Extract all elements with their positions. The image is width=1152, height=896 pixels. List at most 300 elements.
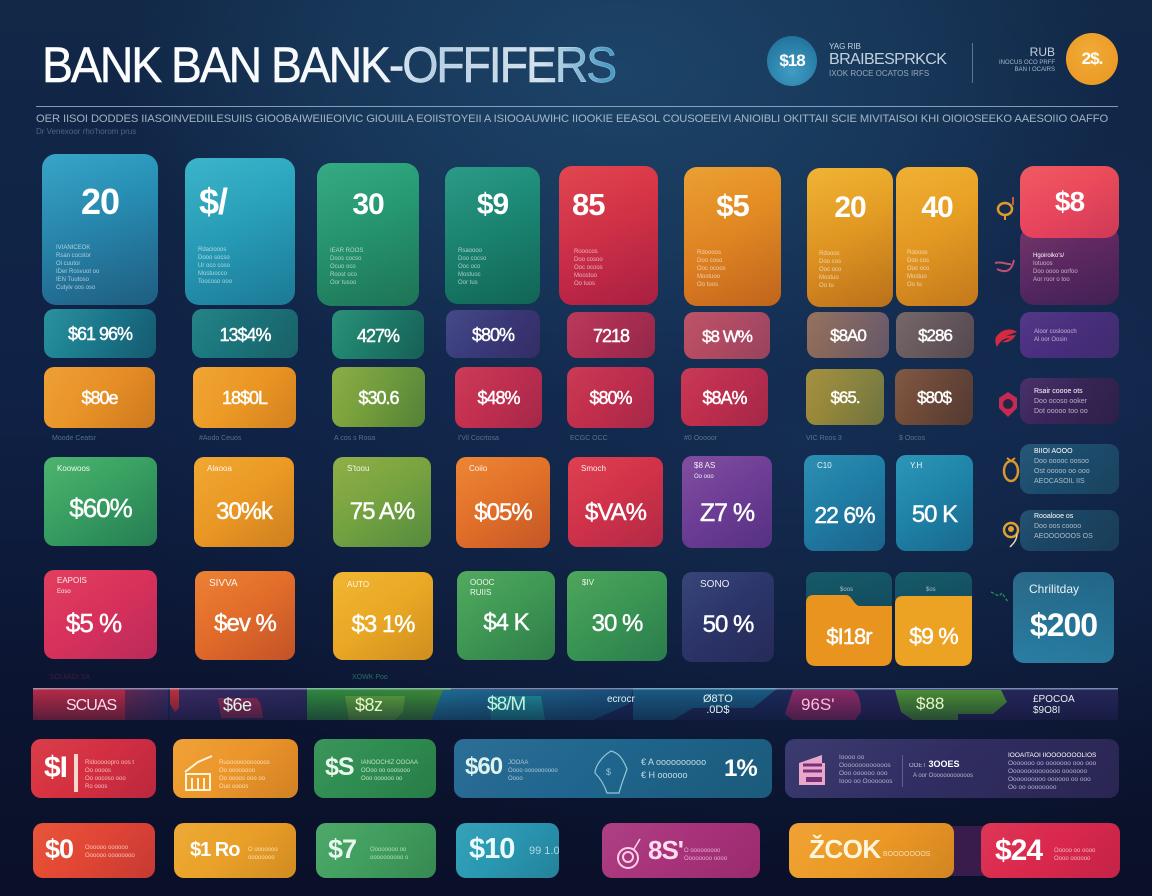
discount card: deep orange (456, 457, 550, 548)
value: 18$0L (222, 388, 267, 408)
value: $200 (1030, 607, 1097, 643)
details: Doo oooo oorfoo (1033, 269, 1078, 275)
details: JOOAA (508, 760, 528, 766)
info card: blue lower (1020, 510, 1119, 551)
icon: ring (996, 197, 1014, 220)
details (1034, 388, 1088, 415)
caption: ECGC OCC (570, 435, 608, 442)
header text: left block (829, 42, 947, 78)
details: Rsan cocstor (56, 253, 91, 259)
value: 427% (357, 326, 399, 346)
value: $65. (830, 388, 860, 407)
value: $4 K (483, 609, 529, 636)
details: Oooooo oooooo (85, 845, 128, 851)
details: Hgoiroiko's/ (1033, 253, 1064, 259)
details: Ooc oco (907, 266, 929, 272)
rate card (567, 312, 655, 358)
value: $80e (81, 388, 118, 408)
details: Rsair coooe ots (1034, 388, 1083, 395)
rate card (44, 309, 156, 358)
caption: Moode Ceatsr (52, 435, 96, 442)
details: Doo coso (697, 258, 722, 264)
rate card (192, 309, 298, 358)
ribbon value: $9O8I (1033, 705, 1060, 716)
details (508, 759, 558, 783)
subtitle: OER IISOI DODDES IIASOINVEDIILESUIIS GIOOBAIWEIIEOIVIC GIOUIILA EOIISTOYEII A ISIOOAUWIHC IIOOKIE EEASOL COUSOEEIVI ANIOIBLI OKITTAII SCIE MIVITAISOI KHI OIOIOSEEKO AAESOIIO OAFFO (36, 113, 1108, 125)
bar (74, 754, 78, 792)
value: 20 (834, 191, 866, 224)
caption: I'Vil Cocrtosa (458, 435, 499, 442)
value card (681, 368, 768, 426)
details (56, 244, 100, 291)
details: Ooo oooooo ooo (839, 770, 887, 777)
ribbon band (33, 688, 1118, 720)
ribbon value (1033, 694, 1075, 716)
details: Mostuo (819, 275, 839, 281)
info card: dark purple (1020, 378, 1119, 424)
value: $05% (474, 499, 532, 526)
details (458, 248, 486, 286)
label: S'toou (347, 464, 369, 473)
header badge: blue coin: $18 (779, 51, 805, 70)
icon: gold ring (1002, 457, 1020, 482)
info card: purple (1020, 312, 1119, 358)
details: Oo oocoso ooo (85, 776, 126, 782)
offer card: green (567, 571, 667, 661)
details: Doos cocso (330, 256, 361, 262)
label: SIVVA (209, 578, 238, 589)
details: € A oooooooooo (641, 757, 706, 767)
label: Y.H (910, 461, 922, 470)
ribbon value: $8z (355, 695, 383, 715)
details: OOoo oo ooosooo (361, 768, 410, 774)
details: Rdoooos (697, 250, 721, 256)
details: Toocoso ooo (198, 279, 232, 285)
folder front (806, 595, 892, 666)
offer card: $8 coral (1020, 166, 1119, 238)
ribbon value: $8/M (487, 694, 525, 715)
caption: VIC Roos 3 (806, 435, 842, 442)
offer card: 20 amber (807, 168, 893, 307)
folder front (895, 596, 972, 666)
faint green mark (990, 592, 1008, 602)
details (361, 759, 418, 783)
offer card: 30 (317, 163, 419, 306)
details: Ioooo oo (839, 754, 864, 761)
value: $8A0 (830, 326, 866, 345)
details: Ur oco coso (198, 263, 230, 269)
details: Aloor cosloooch (1034, 329, 1077, 335)
details: oooooooooo o (370, 855, 408, 861)
details: Mostuocco (198, 271, 227, 277)
details: Oooooooo oo (370, 847, 406, 853)
value: $60 (465, 753, 502, 780)
details: Oooooo oooooooo (85, 853, 135, 859)
ribbon segment: magenta (785, 690, 861, 720)
value card (193, 367, 296, 428)
details: Iotuoos (1033, 261, 1053, 267)
details: IOOAITAOI IIOOOOOOOLIOS (1008, 752, 1096, 759)
label: SONO (700, 579, 729, 590)
rate card (807, 312, 889, 358)
caption: A cos s Rooa (334, 435, 375, 442)
discount card: green (44, 457, 157, 546)
value: 13$4% (219, 325, 271, 345)
value: 50 % (703, 611, 753, 638)
label (470, 578, 494, 597)
details: Dot ooooo too oo (1034, 408, 1088, 415)
details (1034, 448, 1090, 485)
folder card: amber (895, 572, 972, 666)
details: Oo oo oooooooo (1008, 784, 1056, 791)
rate card (896, 312, 974, 358)
details: Ooooooooooooos (839, 762, 891, 769)
offer card: $9 (445, 167, 540, 304)
offer card: amber (333, 572, 433, 660)
label: $IV (582, 578, 594, 587)
value: $80% (589, 388, 632, 408)
details: Doo ocoso ooker (1034, 398, 1087, 405)
header divider (972, 43, 973, 83)
details: Rdooos (907, 250, 928, 256)
details: Mostuo (907, 274, 927, 280)
details: Ouo oooos (219, 784, 248, 790)
caption: SOUIADI SA (50, 674, 90, 681)
value: $1 Ro (190, 839, 239, 861)
details: BOOOOOOOS (883, 851, 930, 858)
dark purple connector (950, 826, 985, 876)
value card (455, 367, 542, 428)
value: 30%k (216, 498, 272, 525)
value card (332, 367, 425, 427)
promo card: magenta (602, 823, 760, 878)
discount card: olive (333, 457, 431, 547)
value: 30 % (592, 610, 642, 637)
details (1033, 252, 1078, 283)
header text: right block: BAN I OCAIRS (1015, 67, 1055, 73)
details: Oor tusoo (330, 280, 356, 286)
promo card: green (316, 823, 436, 878)
ribbon value: .0D$ (706, 704, 730, 716)
offer card: navy (682, 572, 774, 662)
icon: gold spiral (1002, 522, 1020, 548)
ribbon segment: blue (431, 690, 633, 720)
details (198, 246, 232, 285)
details: O ooooooo (248, 847, 278, 853)
ribbon top edge (33, 688, 1118, 690)
value: 75 A% (350, 498, 414, 525)
details (1054, 847, 1095, 863)
promo card: blue wide (454, 739, 772, 798)
value: 22 6% (814, 502, 875, 528)
details: Ruoooooooooooos (219, 760, 270, 766)
ribbon segment: crimson (33, 688, 168, 720)
label: $oos (840, 587, 853, 593)
header text: right block (999, 45, 1055, 73)
icon: hook (994, 260, 1015, 272)
details: IDer Rosvuot oo (56, 269, 99, 275)
label: Alaooa (207, 464, 232, 473)
value: 40 (921, 191, 953, 224)
ribbon segment: green tab (895, 690, 1007, 720)
label: RUIIS (470, 588, 491, 597)
details (697, 250, 726, 288)
discount card: red (568, 457, 663, 547)
header text: left block: YAG RIB (829, 42, 861, 51)
value: $286 (918, 326, 952, 345)
value: $S (325, 753, 354, 781)
promo card: red-orange (33, 823, 155, 878)
details: Ooc ocoos (697, 266, 726, 272)
details: Oo tu (907, 282, 922, 288)
offer card: lower purple panel (1020, 226, 1119, 305)
value: 8S' (648, 835, 683, 865)
details (1008, 752, 1096, 792)
value: $5 % (66, 608, 121, 638)
details: Rdooos (819, 251, 840, 257)
subtitle: Dr Venexoor rho'horom prus (36, 127, 136, 136)
offer card: 20 (42, 154, 158, 305)
details (839, 754, 892, 786)
details: Ocuo oco (330, 264, 356, 270)
ribbon value: Ø8TO (703, 693, 733, 705)
details: Rooocos (574, 249, 598, 255)
header text: left block: IXOK ROCE OCATOS IRFS (829, 69, 929, 78)
value: OOET 3OOES (909, 759, 960, 769)
promo card: red (31, 739, 156, 798)
ribbon shadow (33, 688, 1118, 720)
details: IEAR ROOS (330, 248, 363, 254)
ribbon value: $6e (223, 695, 252, 715)
label: Eoso (57, 589, 71, 595)
faint labels above ribbon (50, 674, 388, 681)
value: $/ (199, 181, 227, 222)
ribbon value (703, 693, 733, 716)
details: Ost ooooo oo ooo (1034, 468, 1090, 475)
value: 30 (352, 188, 384, 221)
value: 50 K (912, 501, 957, 528)
details: Oo tuos (574, 281, 595, 287)
details: Oo tuos (697, 282, 718, 288)
value: 85 (572, 187, 604, 222)
details: Mostuoo (697, 274, 720, 280)
caption: $ Oocos (899, 435, 925, 442)
value: $30.6 (358, 388, 399, 408)
details: Ooc oco (819, 267, 841, 273)
caption: #0 Ooooor (684, 435, 717, 442)
details: Oooo oooooooooo (508, 768, 558, 774)
details: Ooooooo oo ooooooo ooo ooo (1008, 760, 1096, 767)
ribbon base (33, 688, 1118, 720)
details: Ooooo oo oooo (1054, 848, 1095, 854)
value: $9 % (909, 623, 958, 649)
value: $24 (995, 834, 1042, 867)
details: Oooo oooooo (1054, 856, 1090, 862)
details (907, 250, 930, 288)
header text: left block: BRAIBESPRKCK (829, 51, 946, 68)
promo card: amber (174, 823, 296, 878)
info card: blue upper (1020, 444, 1119, 494)
value: $ev % (214, 610, 276, 637)
details (219, 760, 270, 790)
details: Roost oco (330, 272, 357, 278)
details (1034, 512, 1093, 540)
value: $48% (477, 388, 520, 408)
label: AUTO (347, 580, 369, 589)
label: OOOC (470, 578, 494, 587)
value card (895, 369, 973, 425)
details: Oor tus (458, 280, 478, 286)
divider (902, 755, 903, 787)
discount card: blue (804, 455, 885, 551)
header rule (36, 106, 1118, 107)
value: 1% (724, 755, 757, 782)
icon: book (798, 753, 826, 787)
subtitle (36, 113, 1108, 136)
offer card: 40 (896, 167, 978, 306)
details (248, 846, 278, 862)
folder back (895, 572, 972, 622)
caption: XOWK Poo (352, 674, 388, 681)
icon: bulb: $ (606, 767, 611, 777)
label: Chrilitday (1029, 582, 1079, 596)
promo card: navy wide (785, 739, 1119, 798)
value: $80% (472, 325, 514, 345)
details: Ooo oooooo oo (361, 776, 402, 782)
header badge: orange coin: 2$. (1082, 49, 1102, 68)
details: Oo oooos (85, 768, 111, 774)
details (85, 844, 135, 860)
header badge: blue coin (767, 36, 817, 86)
details: Oooooooooo oooooo oo ooo (1008, 776, 1091, 783)
details: Dooo socso (198, 255, 230, 261)
details: Mostuoc (458, 272, 481, 278)
label (57, 576, 87, 595)
details: Doo cos (819, 259, 841, 265)
promo card: red $24 (981, 823, 1120, 878)
ribbon value: $88 (916, 694, 944, 713)
title: BANK BAN BANK-OFFIFERS (42, 37, 615, 93)
details: Doo oos coooo (1034, 523, 1081, 530)
details: Ooc oco (458, 264, 480, 270)
value: $8 W% (702, 327, 752, 346)
ribbon labels (66, 693, 1075, 716)
value card (806, 369, 884, 425)
label: C10 (817, 461, 832, 470)
details: Doo cosoo (574, 257, 603, 263)
value: $9 (477, 188, 508, 221)
value: $I18r (826, 624, 872, 649)
value card (567, 367, 654, 428)
details: Oooooooo oooo (684, 856, 727, 862)
value: $VA% (585, 499, 646, 526)
details: Rooalooe os (1034, 513, 1073, 520)
details: Iooo oo Ooooooos (839, 778, 892, 785)
details (574, 248, 603, 287)
caption row (52, 434, 925, 442)
rate card (332, 310, 424, 359)
header badge: orange coin (1066, 33, 1118, 85)
details (819, 250, 842, 289)
ribbon value: ecrocr (607, 694, 635, 705)
header text: right block: RUB (1030, 45, 1055, 59)
value: $10 (469, 833, 514, 865)
details: O ooooooooo (684, 848, 720, 854)
offer card: orange-red (195, 571, 295, 660)
promo card: orange $0K (789, 823, 954, 878)
details: Doo cocso (458, 256, 486, 262)
details: Al oor Oosin (1034, 337, 1067, 343)
details: Oooo (508, 776, 523, 782)
value: $0 (45, 834, 73, 864)
discount card: purple (682, 456, 772, 548)
details (641, 756, 706, 782)
caption: #Aodo Ceuos (199, 435, 241, 442)
details: Aor roor o too (1033, 277, 1070, 283)
details (1034, 328, 1077, 343)
ribbon segment: green (307, 688, 451, 720)
ribbon value: 96S' (801, 695, 834, 714)
label (694, 461, 715, 480)
icon: spiral (616, 837, 642, 873)
ribbon value: £POCOA (1033, 694, 1075, 705)
offer card: crimson (44, 570, 157, 659)
discount card: blue (896, 455, 973, 551)
details: Oo oooos ooo oo (219, 776, 265, 782)
value card (44, 367, 155, 428)
label: $os (926, 587, 936, 593)
offer card: green (457, 571, 555, 660)
value: $80$ (917, 388, 951, 407)
details: Oo tu (819, 283, 834, 289)
icon: rising chart (184, 755, 212, 791)
details (370, 846, 408, 862)
value: $60% (69, 493, 132, 523)
value: 7218 (593, 326, 629, 346)
label: Koowoos (57, 464, 90, 473)
promo card: teal (456, 823, 559, 878)
offer card: $200 (1013, 572, 1114, 663)
value: $5 (716, 188, 749, 223)
value: 20 (81, 181, 119, 222)
details: AEOCASOIL IIS (1034, 478, 1085, 485)
details: Ridooooopro oos t (85, 760, 134, 766)
ribbon segment: dark panel (861, 690, 1118, 720)
icon: bulb (593, 749, 629, 795)
details: Doo cos (907, 258, 929, 264)
details: Moostuo (574, 273, 597, 279)
details: Ooc ocoos (574, 265, 603, 271)
icon: target shield (999, 392, 1017, 417)
details: A oor Oooooooooooos (913, 773, 973, 779)
folder back (806, 572, 892, 622)
details: € H oooooo (641, 770, 688, 780)
details: oooooooo (248, 855, 275, 861)
rate card (446, 310, 540, 358)
details: IANOOCHIZ OOOAA (361, 760, 418, 766)
offer card: 85 (559, 166, 658, 305)
label: $8 AS (694, 461, 715, 470)
icon: red leaf (995, 330, 1017, 347)
label: Oo ooo (694, 474, 714, 480)
label: EAPOIS (57, 576, 87, 585)
details (684, 847, 727, 863)
details: Oooooooooooooo ooooooo (1008, 768, 1087, 775)
folder card: amber (806, 572, 892, 666)
ribbon segment: purple (170, 688, 307, 720)
details: 99 1.0 (529, 845, 559, 857)
details (330, 248, 364, 286)
